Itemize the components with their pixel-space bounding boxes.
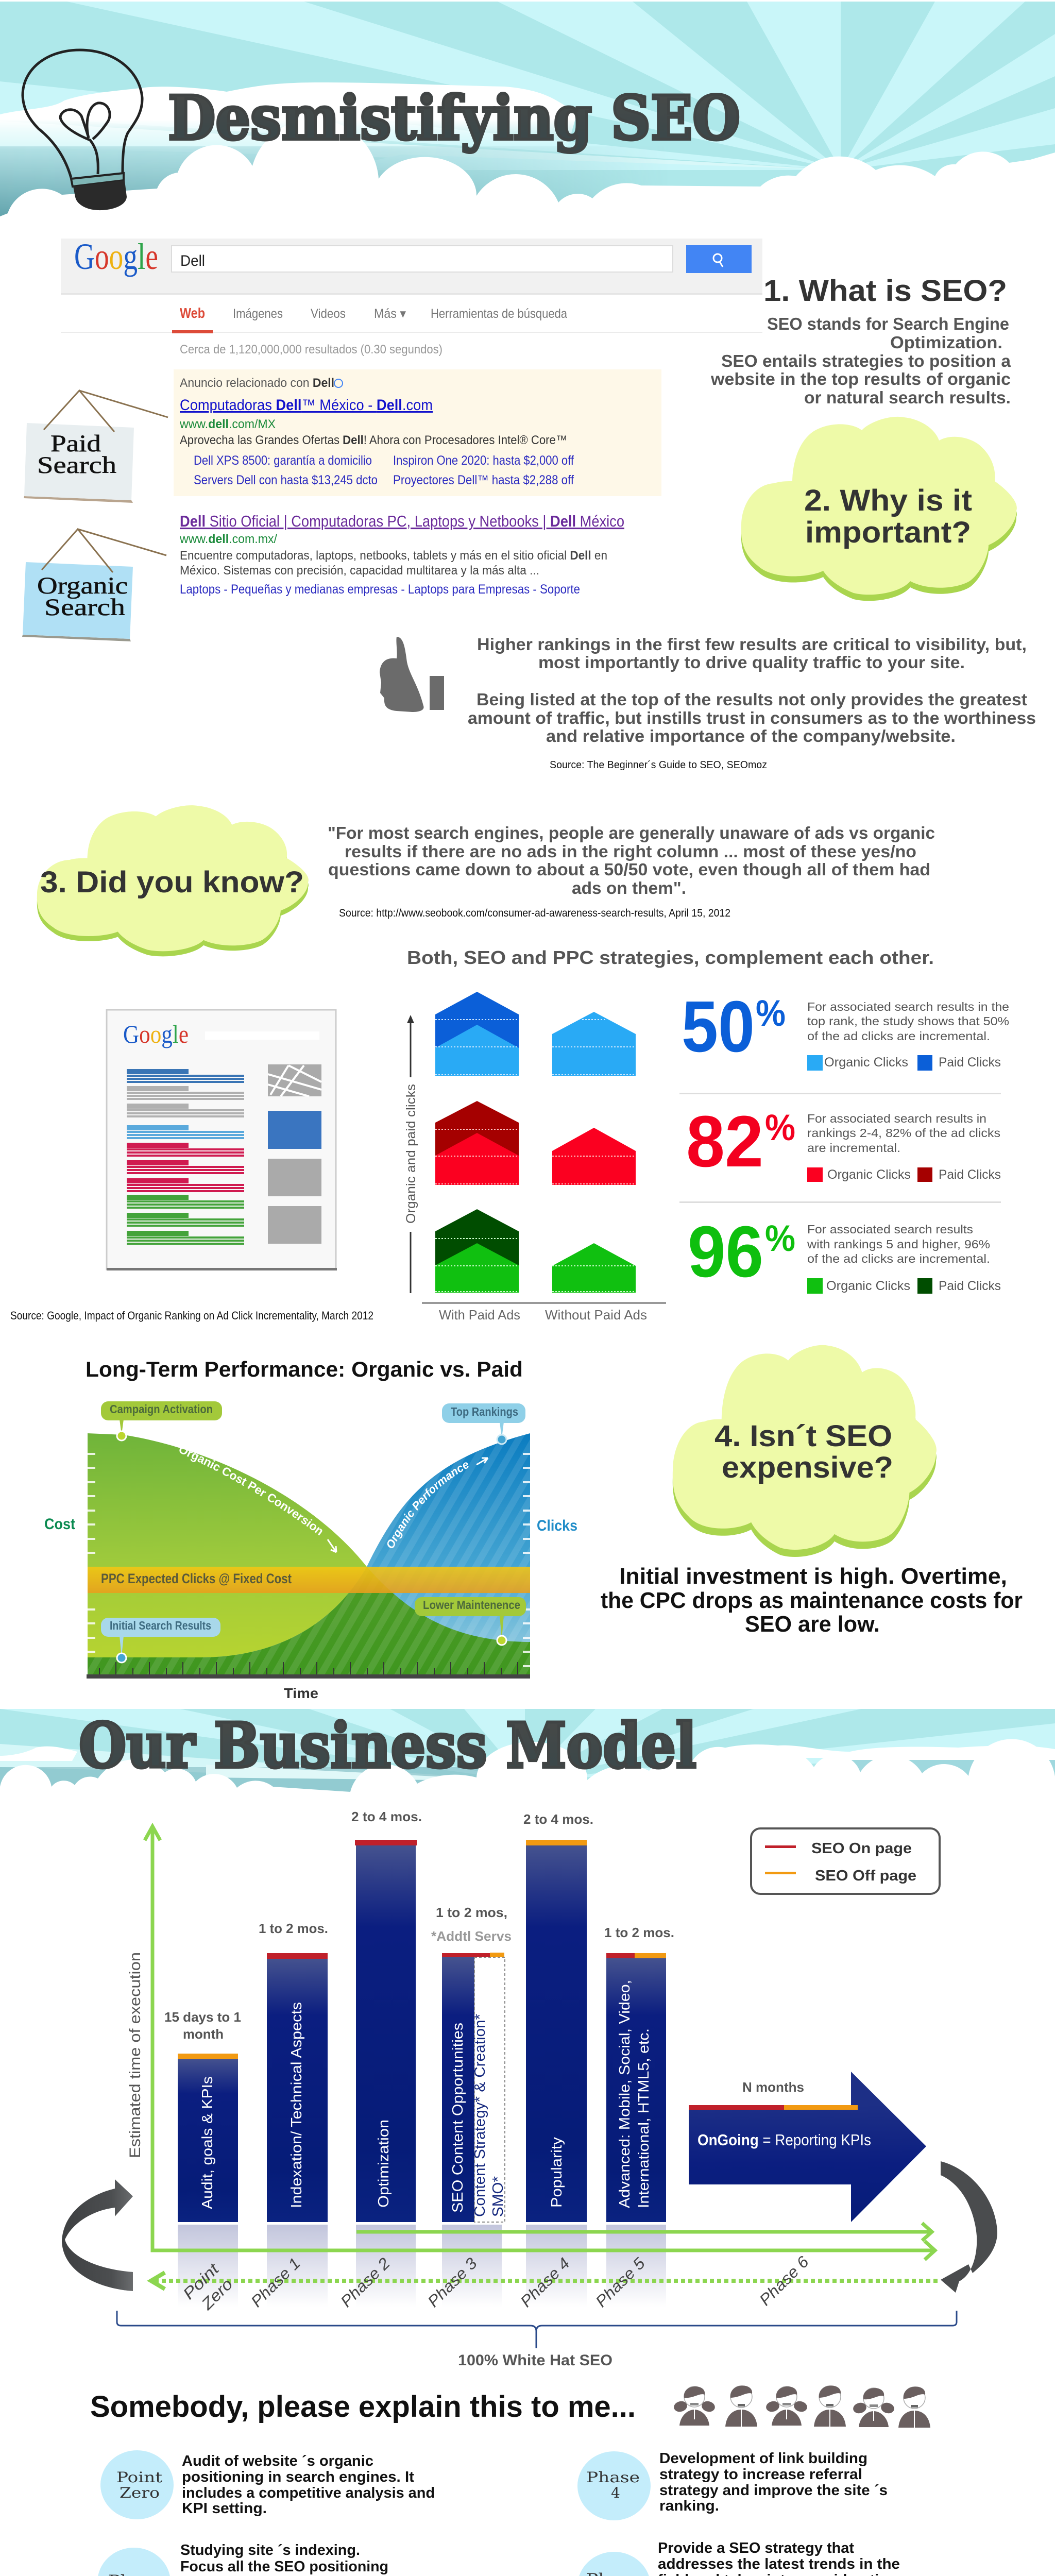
callout cloud: why is it important: important? — [805, 516, 971, 549]
text block: initial investment: the CPC drops as maintenance costs for — [601, 1588, 1023, 1613]
red houses — [435, 1101, 636, 1185]
section banner: sky and clouds — [0, 1709, 1055, 1803]
curve label: organic performance: Organic Performance — [387, 1462, 469, 1548]
arrow: right cycle — [941, 2161, 997, 2293]
bar: phase 1 — [267, 1953, 328, 2222]
item: phase 4: strategy and improve the site ´s — [659, 2482, 888, 2499]
text block: SEO definition — [710, 314, 1011, 407]
y axis: Organic and paid clicks — [404, 1084, 418, 1224]
item: phase 1 — [97, 2542, 406, 2576]
bar: phase 2 — [355, 1840, 417, 2222]
text block: why it is important: Being listed at the top of the results not only provides the greatest — [477, 690, 1027, 709]
bar: phase 4: Popularity — [549, 2137, 565, 2208]
sign: paid search — [24, 391, 168, 503]
text block: SEO definition: or natural search results. — [804, 388, 1011, 407]
results count: Cerca de 1,120,000,000 resultados (0.30 segundos) — [180, 343, 443, 357]
x axis labels — [439, 1307, 647, 1323]
panel: google results page illustration: Google — [123, 1020, 189, 1048]
callout cloud: isn't SEO expensive — [673, 1345, 937, 1557]
arrow: phase 6 ongoing: OnGoing = Reporting KPIs — [697, 2131, 871, 2149]
heading: somebody please explain: Somebody, please explain this to me... — [90, 2390, 636, 2424]
stat: 50 percent: % — [756, 993, 786, 1034]
search tabs: Web — [180, 305, 205, 321]
chart: long-term performance — [87, 1401, 530, 1679]
callout cloud: isn't SEO expensive: expensive? — [722, 1451, 893, 1484]
item: phase 4 — [577, 2450, 888, 2520]
stat: 82 percent: For associated search results in — [807, 1112, 986, 1125]
bar: point zero — [178, 2054, 238, 2222]
y axis — [404, 1015, 418, 1293]
phase labels: Zero — [197, 2275, 236, 2314]
text block: why it is important — [468, 635, 1036, 745]
PPC band: PPC Expected Clicks @ Fixed Cost — [101, 1571, 292, 1586]
item: phase 4: ranking. — [659, 2498, 719, 2514]
bar: phase 3: Content Strategy* & Creation* — [472, 2014, 488, 2217]
stat: 50 percent: Paid Clicks — [939, 1055, 1001, 1070]
stat: 50 percent: For associated search results in the — [807, 1000, 1009, 1013]
callout: lower maintenance — [415, 1597, 526, 1645]
stat: 96 percent: For associated search results — [807, 1223, 973, 1236]
duration labels: 1 to 2 mos. — [604, 1925, 674, 1940]
text block: initial investment: Initial investment is high. Overtime, — [619, 1564, 1007, 1589]
item: point zero: Zero — [120, 2484, 160, 2501]
stat: 82 percent — [686, 1100, 1001, 1182]
search tabs: Herramientas de búsqueda — [431, 307, 567, 321]
text block: initial investment — [601, 1564, 1023, 1637]
legend: SEO On page — [811, 1840, 912, 1857]
phase labels: Phase 1 — [247, 2254, 304, 2311]
search box: Dell — [180, 252, 205, 269]
stat: 96 percent: 96 — [688, 1211, 763, 1292]
header banner: sky and clouds — [0, 2, 1055, 227]
axis label: time: Time — [284, 1685, 318, 1701]
phase labels: Phase 6 — [756, 2252, 812, 2309]
stat: 96 percent: with rankings 5 and higher, 96% — [807, 1238, 990, 1251]
item: phase 4: strategy to increase referral — [659, 2466, 862, 2483]
blue houses — [435, 992, 636, 1076]
item: point zero: Audit of website ´s organic — [182, 2453, 373, 2469]
search tabs: Imágenes — [233, 307, 283, 321]
curve label: organic cost per conversion: Organic Cost Per Conversion — [179, 1448, 322, 1535]
callout cloud: isn't SEO expensive: 4. Isn´t SEO — [714, 1419, 892, 1453]
duration labels: N months — [742, 2079, 804, 2095]
phase labels: Point — [179, 2259, 223, 2303]
bar: phase 4 — [526, 1840, 587, 2222]
callout cloud: why is it important: 2. Why is it — [804, 484, 972, 517]
item: phase 5: Provide a SEO strategy that — [658, 2540, 854, 2556]
callout: campaign activation — [101, 1401, 222, 1440]
search tabs: Más ▾ — [374, 307, 406, 321]
item: phase 5: addresses the latest trends in the — [658, 2556, 900, 2572]
duration labels: 15 days to 1 — [164, 2009, 241, 2025]
paid ad block: Dell XPS 8500: garantía a domicilio — [194, 453, 372, 468]
stat: 82 percent: Organic Clicks — [827, 1167, 911, 1182]
arrow: phase 6 ongoing — [689, 2072, 926, 2222]
icon: thumbs up — [380, 637, 444, 712]
bar: point zero: Audit, goals & KPIs — [199, 2076, 216, 2209]
text block: why it is important: amount of traffic, but instills trust in consumers as to the worthiness — [468, 708, 1036, 727]
stat: 50 percent — [682, 986, 1009, 1071]
dotted return arrow — [151, 2273, 939, 2289]
google header bar — [61, 239, 762, 294]
sign: organic search: Organic — [37, 572, 128, 599]
organic result block: www.dell.com.mx/ — [179, 532, 277, 546]
panel: google results page illustration — [107, 1010, 337, 1270]
panel: google search screenshot — [61, 236, 762, 597]
axis ticks — [88, 1454, 530, 1666]
stat: 50 percent: Organic Clicks — [824, 1055, 908, 1070]
y axis arrow — [145, 1826, 935, 2260]
paid ad block: Aprovecha las Grandes Ofertas Dell! Ahora con Procesadores Intel® Core™ — [180, 433, 567, 447]
sign: organic search: Search — [44, 594, 125, 621]
quote: ads on them". — [572, 878, 686, 897]
callout cloud: did you know: 3. Did you know? — [40, 866, 304, 899]
heading: both strategies: Both, SEO and PPC strategies, complement each other. — [407, 947, 934, 968]
callout cloud: why is it important — [741, 417, 1017, 601]
callout: lower maintenance: Lower Maintenence — [423, 1598, 520, 1612]
source note: Source: http://www.seobook.com/consumer-ad-awareness-search-results, April 15, 2012 — [339, 907, 730, 919]
callout: top rankings — [442, 1403, 525, 1444]
text block: SEO definition: SEO entails strategies to position a — [721, 351, 1011, 370]
duration labels: 2 to 4 mos. — [523, 1811, 593, 1827]
search tabs — [61, 305, 762, 333]
stat: 96 percent: % — [765, 1218, 795, 1259]
bar: phase 1: Indexation/ Technical Aspects — [288, 2002, 305, 2208]
search tabs: Videos — [311, 307, 346, 321]
text block: why it is important: and relative importance of the company/website. — [546, 726, 956, 745]
stat: 96 percent: Paid Clicks — [939, 1279, 1001, 1293]
item: phase 5 — [577, 2540, 900, 2576]
stat: 82 percent: are incremental. — [807, 1141, 900, 1155]
heading: what is SEO: 1. What is SEO? — [763, 274, 1007, 308]
paid ad block: Inspiron One 2020: hasta $2,000 off — [393, 453, 574, 468]
bar: phase 5: International, HTML5, etc. — [636, 2028, 652, 2208]
item: point zero: Point — [116, 2469, 163, 2486]
x axis labels: Without Paid Ads — [545, 1307, 647, 1323]
item: point zero — [100, 2450, 435, 2519]
phase labels — [179, 2252, 812, 2314]
upper x arrow — [356, 2223, 932, 2241]
icons: people — [673, 2385, 930, 2428]
legend — [751, 1828, 940, 1894]
quote: "For most search engines, people are generally unaware of ads vs organic — [328, 823, 935, 842]
phase labels: Phase 4 — [517, 2254, 573, 2311]
paid ad block: Anuncio relacionado con Dell — [180, 376, 334, 390]
duration labels: 2 to 4 mos. — [351, 1809, 422, 1824]
chart: organic and paid clicks houses — [404, 992, 666, 1323]
item: phase 4: 4 — [611, 2484, 620, 2501]
duration labels — [164, 1809, 804, 2095]
organic result block: México. Sistemas con precisión, capacidad multitarea y la más alta ... — [180, 564, 539, 578]
x axis labels: With Paid Ads — [439, 1307, 520, 1323]
icon: light bulb — [23, 50, 142, 210]
organic result block: Encuentre computadoras, laptops, netbooks, tablets y más en el sitio oficial Dell en — [180, 549, 607, 563]
chart: business model phases — [62, 1809, 997, 2369]
PPC band — [88, 1567, 530, 1593]
item: phase 4: Phase — [586, 2469, 640, 2486]
search box — [172, 246, 673, 272]
organic result block: Dell Sitio Oficial | Computadoras PC, Laptops y Netbooks | Dell México — [180, 512, 624, 530]
phase labels: Phase 5 — [592, 2254, 649, 2311]
title: Desmistifying SEO — [168, 82, 740, 154]
text block: initial investment: SEO are low. — [745, 1612, 880, 1637]
stat: 96 percent: Organic Clicks — [826, 1279, 910, 1293]
y axis label: Estimated time of execution — [127, 1952, 144, 2158]
bar: phase 3 — [442, 1953, 506, 2222]
stat: 96 percent: of the ad clicks are incremental. — [807, 1252, 990, 1265]
callout: initial search results — [101, 1618, 220, 1663]
item: point zero: includes a competitive analysis and — [182, 2485, 435, 2501]
stat: 50 percent: 50 — [682, 986, 755, 1067]
stat: 82 percent: % — [765, 1108, 795, 1148]
stat: 50 percent: top rank, the study shows that 50% — [807, 1014, 1009, 1028]
source note: Source: The Beginner´s Guide to SEO, SEOmoz — [550, 759, 767, 771]
section title: Our Business Model — [79, 1709, 696, 1782]
item: phase 1: Focus all the SEO positioning — [180, 2558, 388, 2575]
arrow: left cycle — [62, 2179, 133, 2291]
stat: 50 percent: of the ad clicks are incremental. — [807, 1029, 990, 1043]
item: point zero: positioning in search engines. It — [182, 2469, 414, 2485]
text block: why it is important: Higher rankings in the first few results are critical to visibility, but, — [477, 635, 1027, 654]
duration labels: month — [183, 2026, 224, 2042]
chart title: Long-Term Performance: Organic vs. Paid — [86, 1357, 523, 1381]
bar: phase 5 — [606, 1953, 666, 2222]
organic performance area — [88, 1433, 530, 1679]
label: white hat: 100% White Hat SEO — [458, 2352, 612, 2369]
quote — [328, 823, 935, 897]
bar: phase 2: Optimization — [376, 2120, 392, 2208]
duration labels: 1 to 2 mos, — [436, 1905, 507, 1920]
item: phase 4: Development of link building — [659, 2450, 867, 2467]
quote: questions came down to about a 50/50 vote, even though all of them had — [328, 860, 930, 879]
axis label: cost: Cost — [44, 1516, 75, 1533]
item: point zero: KPI setting. — [182, 2500, 267, 2517]
phase labels: Phase 2 — [337, 2254, 394, 2311]
text block: SEO definition: SEO stands for Search Engine — [767, 314, 1009, 333]
sign: paid search: Paid — [50, 430, 101, 457]
callout: top rankings: Top Rankings — [451, 1405, 518, 1418]
stat: 96 percent — [688, 1211, 1001, 1294]
stat: 82 percent: Paid Clicks — [939, 1167, 1001, 1182]
search button — [686, 245, 752, 273]
duration labels: 1 to 2 mos. — [259, 1921, 328, 1936]
paid ad block — [174, 369, 661, 496]
text block: SEO definition: Optimization. — [890, 333, 1002, 352]
axis label: clicks: Clicks — [537, 1517, 577, 1534]
sign: paid search: Search — [37, 452, 116, 479]
bar: phase 5: Advanced: Mobile, Social, Video, — [617, 1980, 633, 2208]
text block: why it is important: most importantly to drive quality traffic to your site. — [538, 653, 965, 672]
bar reflections — [178, 2225, 666, 2307]
callout: campaign activation: Campaign Activation — [110, 1402, 213, 1416]
paid ad block: Computadoras Dell™ México - Dell.com — [180, 397, 433, 414]
source note: Source: Google, Impact of Organic Ranking on Ad Click Incrementality, March 2012 — [10, 1309, 373, 1322]
legend: SEO Off page — [815, 1868, 916, 1884]
text block: SEO definition: website in the top results of organic — [710, 369, 1011, 388]
organic result block: Laptops - Pequeñas y medianas empresas - Laptops para Empresas - Soporte — [180, 582, 580, 597]
organic result block — [179, 512, 624, 597]
quote: results if there are no ads in the right column ... most of these yes/no — [345, 842, 916, 861]
stat: 82 percent: 82 — [686, 1100, 763, 1182]
callout cloud: did you know — [37, 805, 309, 956]
bar: phase 3: SMO* — [490, 2176, 506, 2217]
stat: 82 percent: rankings 2-4, 82% of the ad clicks — [807, 1126, 1000, 1140]
duration labels: *Addtl Servs — [431, 1928, 512, 1944]
sign: organic search — [22, 529, 166, 641]
green houses — [435, 1209, 636, 1293]
google logo: Google — [74, 236, 158, 277]
phase labels: Phase 3 — [424, 2254, 481, 2311]
callout: initial search results: Initial Search Results — [110, 1619, 211, 1632]
paid ad block: Proyectores Dell™ hasta $2,288 off — [393, 473, 574, 487]
brace — [117, 2311, 957, 2348]
item: phase 1: Studying site ´s indexing. — [180, 2542, 360, 2558]
paid ad block: www.dell.com/MX — [179, 417, 276, 431]
paid ad block: Servers Dell con hasta $13,245 dcto — [194, 473, 378, 487]
organic cost area — [88, 1433, 530, 1679]
bar: phase 3: SEO Content Opportunities — [450, 2023, 466, 2213]
